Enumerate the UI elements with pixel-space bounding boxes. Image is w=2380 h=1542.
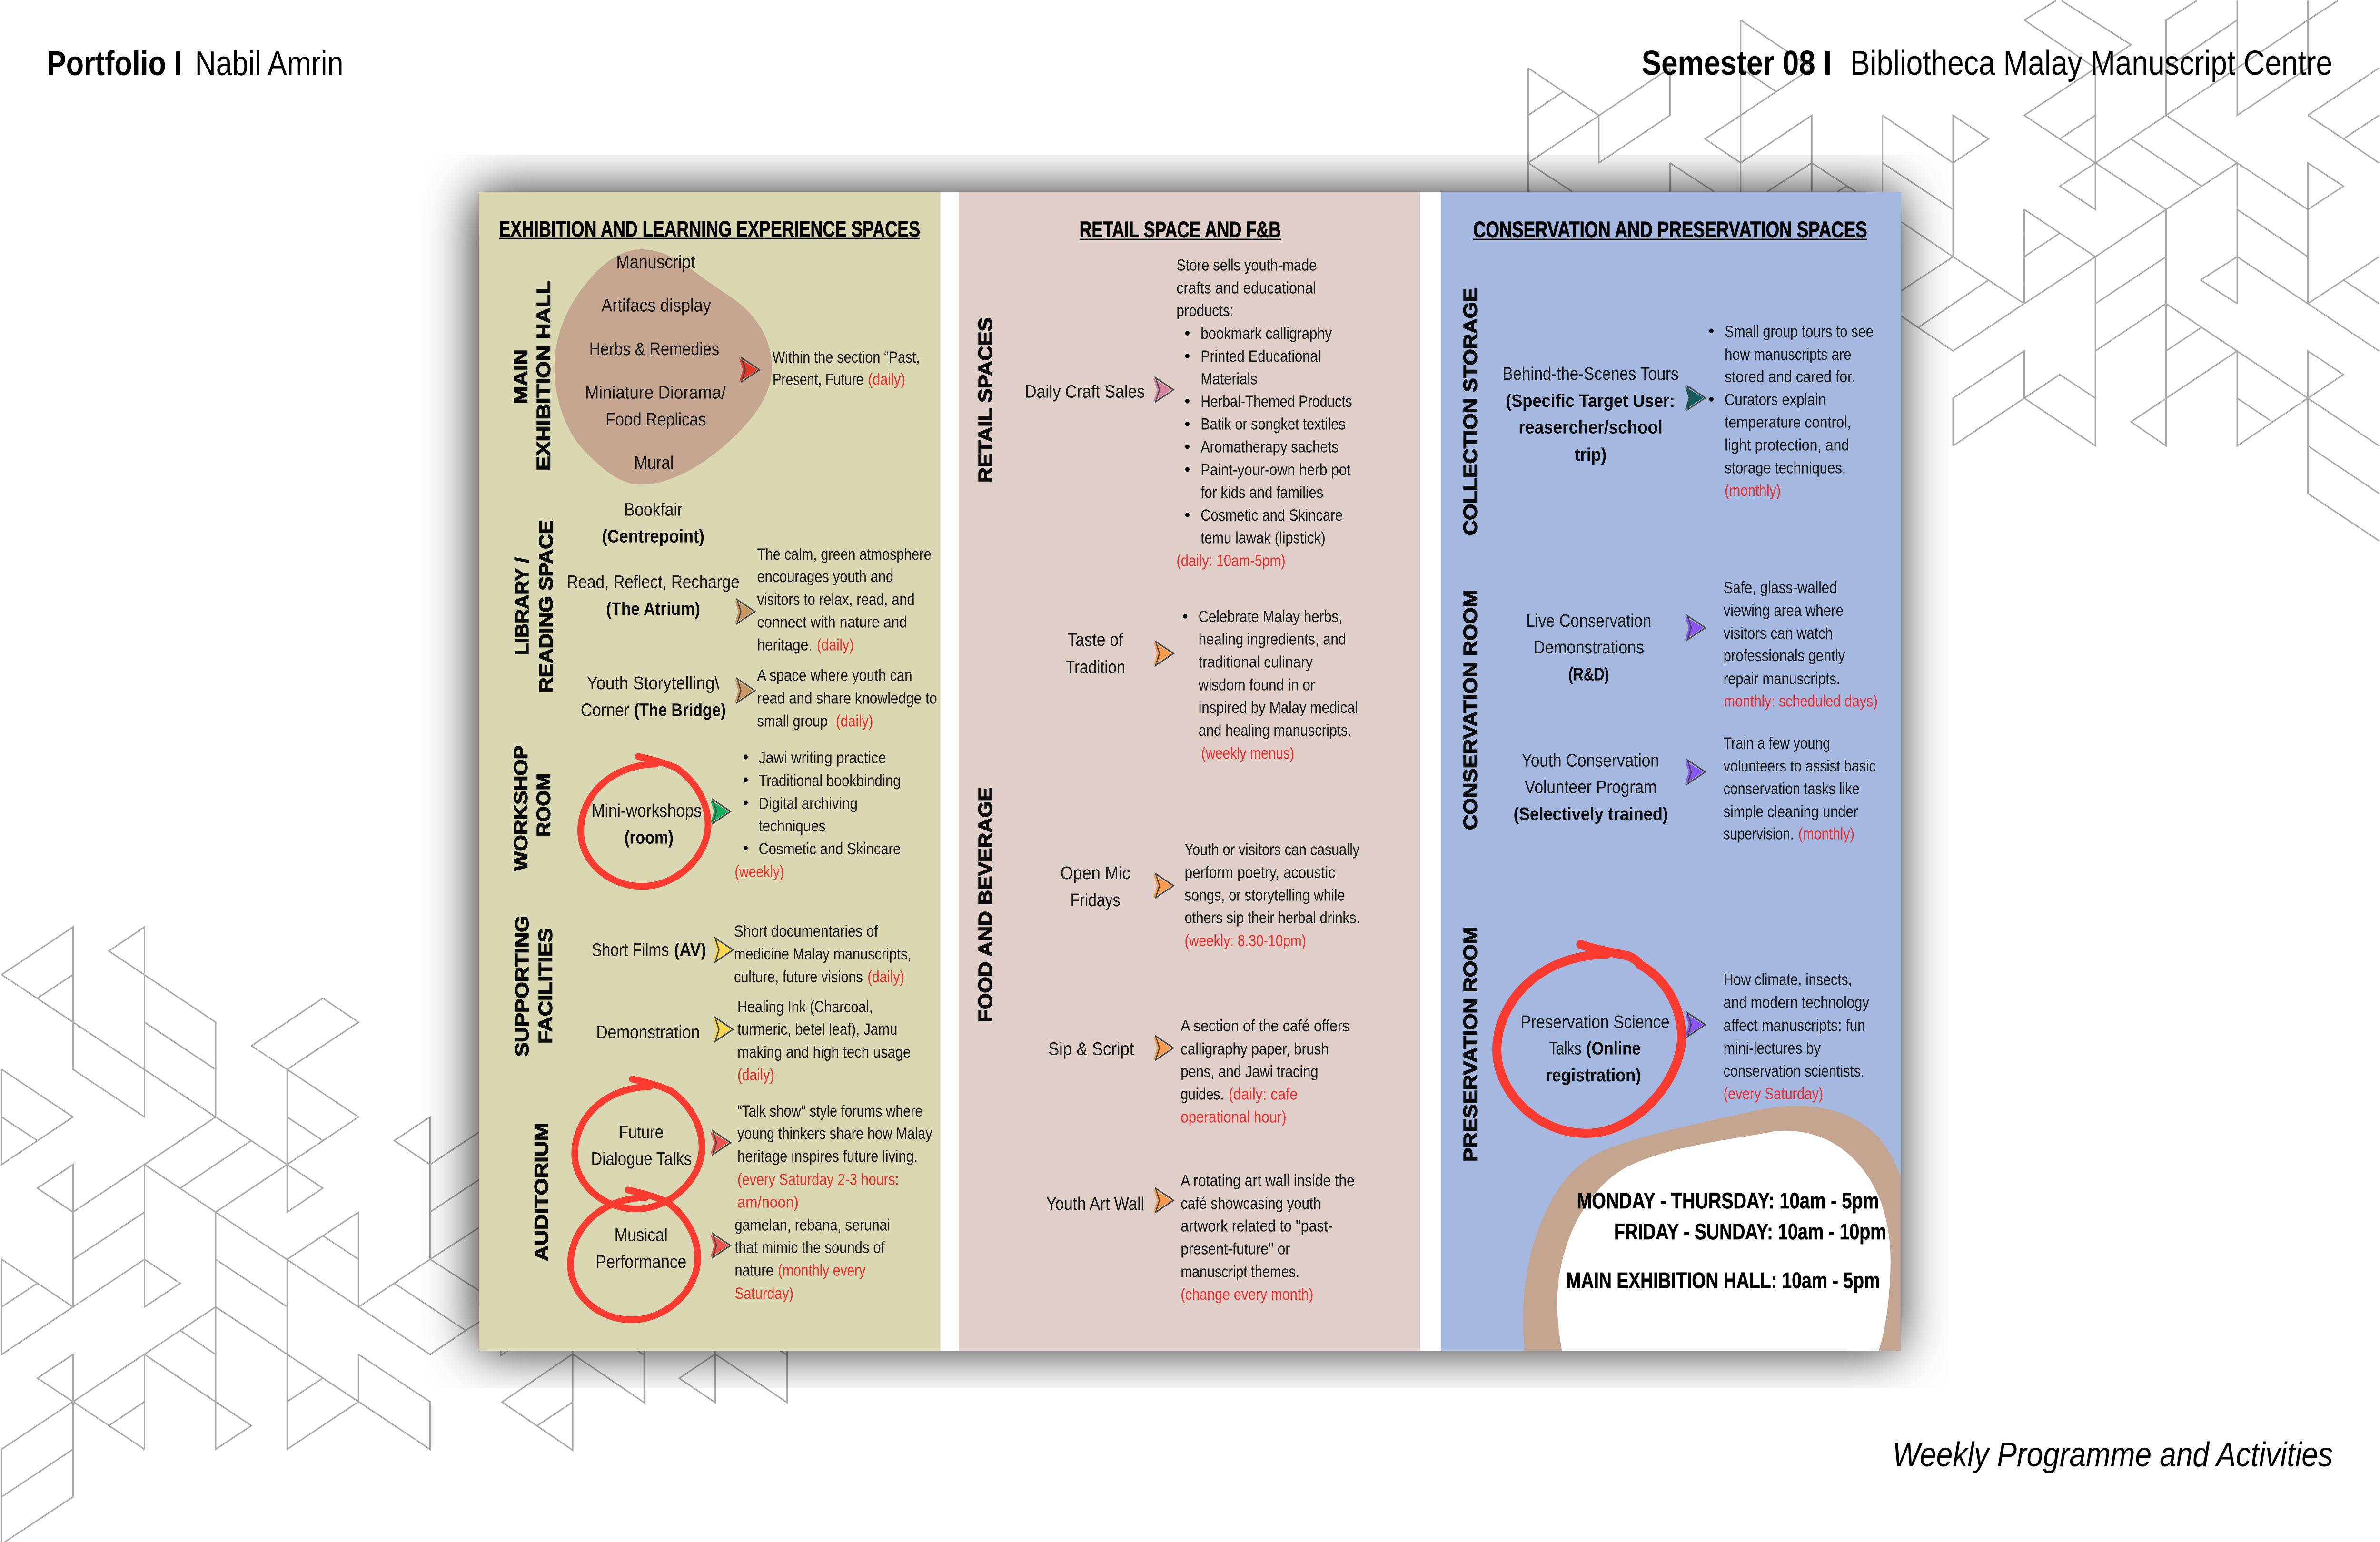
description: gamelan rebana serunai <box>734 1216 890 1303</box>
bullet list: workshop topics <box>734 749 901 881</box>
header left: Portfolio I Nabil Amrin <box>47 45 343 83</box>
description: open mic: Youth or visitors can casually <box>1185 840 1359 859</box>
description: climate insects technology <box>1724 970 1869 1103</box>
description: gamelan rebana serunai: (monthly every <box>778 1261 866 1280</box>
description: calm green atmosphere <box>757 545 932 654</box>
description: short documentaries <box>734 922 912 986</box>
description: rotating art wall: café showcasing youth <box>1180 1194 1321 1212</box>
opening hours text: FRIDAY - SUNDAY: 10am - 10pm <box>1614 1219 1886 1245</box>
activity: short films: (AV) <box>674 940 706 960</box>
activity: youth art wall: Youth Art Wall <box>1046 1194 1144 1214</box>
activity: youth storytelling corner: Youth Storytelling\ <box>587 673 720 693</box>
bullet list: store products: (daily: 10am-5pm) <box>1176 552 1286 570</box>
bullet list: store products: for kids and families <box>1200 483 1323 502</box>
description: knowledge sharing: small group <box>757 712 828 731</box>
activities: bookfair and atrium: (Centrepoint) <box>602 526 704 546</box>
description: train young volunteers: conservation tasks like <box>1724 780 1860 798</box>
description: calm green atmosphere: connect with nature and <box>757 613 907 632</box>
description: open mic: (weekly: 8.30-10pm) <box>1185 931 1306 950</box>
activities: bookfair and atrium: Read, Reflect, Recharge <box>567 572 740 593</box>
description: climate insects technology: conservation scientists. <box>1724 1062 1864 1080</box>
description: talk show forums: young thinkers share how Malay <box>737 1125 932 1143</box>
bullet list: tours: Small group tours to see <box>1725 322 1874 341</box>
bullet list: workshop topics: Jawi writing practice <box>759 749 886 767</box>
description: glass-walled viewing: viewing area where <box>1724 601 1844 620</box>
description: past present future <box>772 348 920 388</box>
blob: white inner shape <box>1557 1131 1891 1351</box>
arrow: orange <box>1153 1036 1173 1060</box>
panel: conservation and preservation spaces <box>1441 192 1901 1351</box>
vertical label: main exhibition hall: MAIN <box>510 349 532 404</box>
bullet list: store products: Batik or songket textiles <box>1200 415 1346 433</box>
exhibit list: Artifacs display <box>601 296 712 316</box>
description: celebrate malay herbs: healing ingredients, and <box>1199 630 1346 648</box>
description: calm green atmosphere: The calm, green atmosphere <box>757 545 932 563</box>
description: train young volunteers <box>1724 734 1876 843</box>
vertical label: workshop room <box>510 745 555 871</box>
vertical label: supporting facilities: SUPPORTING <box>512 916 533 1057</box>
section: preservation room <box>1460 927 1869 1162</box>
description: celebrate malay herbs: traditional culinary <box>1199 653 1313 671</box>
bullet list: tours: storage techniques. <box>1725 458 1846 477</box>
header right: Semester 08 I Bibliotheca Malay Manuscript Centre: Semester 08 I <box>1642 44 1832 82</box>
description: short documentaries: Short documentaries of <box>734 922 878 940</box>
activity: preservation science talks <box>1520 1012 1669 1086</box>
vertical label: conservation room: CONSERVATION ROOM <box>1460 590 1481 830</box>
red hand-drawn circle: preservation science talks <box>1497 944 1682 1133</box>
arrow: orange <box>1153 1188 1173 1212</box>
description: sip and script: pens, and Jawi tracing <box>1180 1062 1318 1080</box>
activity: musical performance <box>595 1225 686 1272</box>
description: celebrate malay herbs: wisdom found in or <box>1198 675 1315 694</box>
activity: mini-workshops: Mini-workshops <box>592 801 702 820</box>
description: healing ink: turmeric, betel leaf), Jamu <box>737 1020 897 1038</box>
arrow: orange <box>1153 642 1173 665</box>
vertical label: workshop room: ROOM <box>533 773 555 837</box>
panel: retail space and F&B <box>959 192 1420 1351</box>
arrow: orange <box>1153 874 1173 898</box>
description: gamelan rebana serunai: that mimic the sounds of <box>734 1238 885 1257</box>
vertical label: main exhibition hall <box>510 281 555 471</box>
activity: behind-the-scenes tours <box>1503 364 1679 465</box>
description: rotating art wall: present-future" or <box>1180 1240 1290 1258</box>
bullet list: store products: Cosmetic and Skincare <box>1200 506 1343 524</box>
header left: Portfolio I Nabil Amrin: Portfolio I <box>47 45 182 83</box>
heading: retail space and F&B: RETAIL SPACE AND F&B <box>1080 217 1281 242</box>
activity: demonstration: Demonstration <box>596 1022 700 1042</box>
description: train young volunteers: simple cleaning under <box>1724 802 1858 820</box>
activity: behind-the-scenes tours: Behind-the-Scenes Tours <box>1503 364 1679 384</box>
exhibit list: Mural <box>634 453 674 473</box>
description: knowledge sharing: A space where youth can <box>757 666 912 685</box>
bullet list: store products <box>1176 256 1352 570</box>
section: retail spaces <box>975 256 1352 570</box>
description: talk show forums <box>737 1102 932 1212</box>
activities: bookfair and atrium: (The Atrium) <box>606 599 700 619</box>
opening hours callout <box>1523 1106 1901 1351</box>
activity: open mic fridays: Open Mic <box>1061 863 1130 883</box>
activity: open mic fridays: Fridays <box>1071 890 1121 910</box>
activity: sip and script: Sip & Script <box>1048 1039 1134 1059</box>
activity: taste of tradition: Tradition <box>1065 657 1125 677</box>
activity: behind-the-scenes tours: trip) <box>1575 445 1606 465</box>
bullet list: store products: Materials <box>1200 370 1257 388</box>
description: healing ink: making and high tech usage <box>737 1043 911 1061</box>
bullet list: tours: light protection, and <box>1725 436 1849 454</box>
description: glass-walled viewing: professionals gently <box>1724 646 1845 665</box>
activity: preservation science talks: Talks <box>1549 1038 1581 1058</box>
description: climate insects technology: mini-lectures by <box>1724 1039 1821 1058</box>
bullet list: store products: Herbal-Themed Products <box>1200 392 1352 411</box>
activity: short films: Short Films <box>592 940 669 960</box>
activity: live conservation demonstrations: Demonstrations <box>1534 638 1644 658</box>
activity: preservation science talks: (Online <box>1586 1038 1641 1058</box>
description: knowledge sharing <box>757 666 937 731</box>
bullet list: workshop topics: techniques <box>759 817 825 835</box>
activity: youth conservation volunteer program: Volunteer Program <box>1525 777 1657 797</box>
arrow: yellow <box>713 1018 733 1041</box>
activity: short films <box>592 940 706 960</box>
opening hours text: MONDAY - THURSDAY: 10am - 5pm <box>1577 1188 1879 1214</box>
description: train young volunteers: Train a few young <box>1724 734 1830 752</box>
description: glass-walled viewing <box>1724 578 1878 710</box>
activities: bookfair and atrium <box>567 499 740 619</box>
arrow: purple <box>1685 616 1705 640</box>
activity: live conservation demonstrations <box>1526 611 1651 684</box>
description: gamelan rebana serunai: nature <box>734 1261 774 1280</box>
description: rotating art wall <box>1180 1171 1355 1304</box>
description: rotating art wall: (change every month) <box>1180 1285 1313 1304</box>
exhibit list: Food Replicas <box>605 409 706 430</box>
section: auditorium <box>531 1079 932 1320</box>
exhibit list: Miniature Diorama/ <box>585 383 726 403</box>
activity: live conservation demonstrations: Live Conservation <box>1526 611 1651 631</box>
description: sip and script: A section of the café offers <box>1180 1017 1349 1035</box>
red hand-drawn circle: future dialogue talks <box>575 1079 702 1209</box>
vertical label: auditorium: AUDITORIUM <box>531 1123 552 1261</box>
activities: bookfair and atrium: Bookfair <box>624 499 683 520</box>
arrow: coral <box>710 1234 731 1257</box>
description: past present future: (daily) <box>868 370 905 388</box>
section: workshop room <box>510 745 901 886</box>
vertical label: preservation room: PRESERVATION ROOM <box>1460 927 1481 1162</box>
description: past present future: Present, Future <box>773 370 863 388</box>
description: climate insects technology: affect manuscripts: fun <box>1724 1016 1865 1035</box>
pattern: upper right isometric lines <box>1528 1 2379 541</box>
description: open mic: others sip their herbal drinks. <box>1185 909 1360 927</box>
arrow: tan <box>734 679 755 702</box>
description: sip and script <box>1180 1017 1349 1126</box>
description: rotating art wall: manuscript themes. <box>1180 1263 1299 1281</box>
description: train young volunteers: supervision. <box>1724 825 1794 843</box>
arrow: purple <box>1685 1013 1705 1037</box>
arrow: coral <box>710 1131 731 1155</box>
description: gamelan rebana serunai: gamelan, rebana, serunai <box>734 1216 890 1235</box>
blob: tan outer shape <box>1523 1106 1901 1351</box>
exhibit list: Manuscript <box>616 252 695 272</box>
footer caption: Weekly Programme and Activities: Weekly Programme and Activities <box>1893 1436 2333 1474</box>
description: short documentaries: culture, future visions <box>734 968 863 986</box>
arrow: teal <box>1685 386 1705 410</box>
arrow: tan <box>734 600 755 623</box>
description: sip and script: calligraphy paper, brush <box>1180 1040 1329 1058</box>
activity: preservation science talks: Preservation Science <box>1520 1012 1669 1032</box>
heading: conservation and preservation: CONSERVATION AND PRESERVATION SPACES <box>1473 217 1867 242</box>
bullet list: tours: Curators explain <box>1725 390 1826 409</box>
red hand-drawn circle: musical performance <box>570 1190 698 1320</box>
vertical label: supporting facilities <box>512 916 556 1057</box>
description: calm green atmosphere: encourages youth and <box>757 568 893 586</box>
activity: preservation science talks: registration) <box>1546 1066 1641 1086</box>
description: calm green atmosphere: heritage. <box>757 636 812 654</box>
activity: youth conservation volunteer program: (Selectively trained) <box>1514 804 1668 824</box>
poster sheet with drop shadow <box>479 192 1901 1351</box>
bullet list: store products: Printed Educational <box>1200 347 1321 366</box>
description: celebrate malay herbs: (weekly menus) <box>1201 744 1294 762</box>
section: food and beverage <box>975 607 1360 1304</box>
red hand-drawn circle: mini-workshops <box>581 757 708 886</box>
activity: daily craft sales: Daily Craft Sales <box>1025 382 1145 402</box>
description: train young volunteers: (monthly) <box>1798 825 1854 843</box>
description: sip and script: operational hour) <box>1180 1108 1287 1126</box>
description: open mic: perform poetry, acoustic <box>1185 863 1335 881</box>
description: sip and script: guides. <box>1180 1085 1224 1103</box>
description: climate insects technology: (every Saturday) <box>1724 1085 1823 1103</box>
description: healing ink: Healing Ink (Charcoal, <box>737 998 873 1016</box>
section: conservation room <box>1460 578 1878 843</box>
description: short documentaries: (daily) <box>867 968 904 986</box>
vertical label: food and beverage: FOOD AND BEVERAGE <box>975 787 996 1022</box>
activity: taste of tradition: Taste of <box>1068 630 1123 650</box>
description: talk show forums: heritage inspires future living. <box>737 1147 918 1166</box>
bullet list: workshop topics: (weekly) <box>734 863 784 881</box>
heading: exhibition and learning: EXHIBITION AND LEARNING EXPERIENCE SPACES <box>499 217 920 241</box>
activity: musical performance: Musical <box>615 1225 668 1245</box>
pattern: lower left isometric lines <box>1 927 787 1542</box>
arrow: yellow <box>713 938 733 962</box>
vertical label: library reading space: READING SPACE <box>536 520 557 692</box>
arrow: green <box>710 800 731 823</box>
activity: youth storytelling corner: (The Bridge) <box>634 700 726 720</box>
activity: mini-workshops <box>592 801 702 848</box>
bullet list: store products: products: <box>1176 301 1234 320</box>
bullet list: workshop topics: Digital archiving <box>759 794 858 813</box>
header right: Semester 08 I Bibliotheca Malay Manuscript Centre: Bibliotheca Malay Manuscript Centre <box>1850 44 2332 82</box>
blob: exhibit list background <box>555 249 772 484</box>
bullet list: tours: (monthly) <box>1725 481 1781 500</box>
description: open mic <box>1185 840 1360 950</box>
section: main exhibition hall <box>510 249 920 484</box>
vertical label: collection storage: COLLECTION STORAGE <box>1460 288 1481 535</box>
panel: exhibition and learning experience spaces <box>479 192 941 1351</box>
vertical label: supporting facilities: FACILITIES <box>535 928 556 1044</box>
vertical label: main exhibition hall: EXHIBITION HALL <box>533 281 555 471</box>
arrow: red <box>739 358 759 382</box>
vertical label: library reading space: LIBRARY / <box>512 557 533 655</box>
bullet list: tours: how manuscripts are <box>1725 345 1851 364</box>
activity: future dialogue talks: Dialogue Talks <box>591 1149 692 1169</box>
description: talk show forums: am/noon) <box>737 1193 799 1212</box>
bullet list: store products: bookmark calligraphy <box>1200 324 1332 343</box>
section: collection storage <box>1460 288 1874 535</box>
description: short documentaries: medicine Malay manuscripts, <box>734 945 912 963</box>
activity: live conservation demonstrations: (R&D) <box>1568 664 1609 684</box>
section: supporting facilities <box>512 916 912 1084</box>
description: celebrate malay herbs: inspired by Malay medical <box>1199 698 1358 717</box>
activity: behind-the-scenes tours: (Specific Target User: <box>1506 391 1675 411</box>
description: talk show forums: (every Saturday 2-3 hours: <box>737 1170 899 1188</box>
activity: future dialogue talks: Future <box>619 1122 664 1142</box>
bullet list: workshop topics: Traditional bookbinding <box>759 771 901 790</box>
activity: open mic fridays <box>1061 863 1130 910</box>
vertical label: retail spaces: RETAIL SPACES <box>975 317 996 483</box>
bullet list: workshop topics: Cosmetic and Skincare <box>759 840 901 858</box>
bullet list: store products: Aromatherapy sachets <box>1200 437 1339 456</box>
activity: youth conservation volunteer program <box>1514 751 1668 824</box>
description: open mic: songs, or storytelling while <box>1185 886 1345 904</box>
exhibit list: Herbs & Remedies <box>589 339 719 359</box>
bullet list: tours: stored and cared for. <box>1725 367 1855 386</box>
arrow: pink <box>1153 378 1173 402</box>
activity: future dialogue talks <box>591 1122 692 1169</box>
bullet list: tours <box>1709 322 1874 500</box>
bullet list: store products: temu lawak (lipstick) <box>1200 529 1326 547</box>
header left: Portfolio I Nabil Amrin: Nabil Amrin <box>195 45 343 83</box>
description: glass-walled viewing: monthly: scheduled days) <box>1724 692 1878 710</box>
description: glass-walled viewing: visitors can watch <box>1724 624 1833 642</box>
description: healing ink <box>737 998 911 1084</box>
activity: musical performance: Performance <box>595 1252 686 1272</box>
activity: youth storytelling corner <box>581 673 726 720</box>
activity: youth storytelling corner: Corner <box>581 700 629 720</box>
bullet list: store products: Paint-your-own herb pot <box>1200 460 1351 479</box>
description: calm green atmosphere: (daily) <box>817 636 854 654</box>
description: knowledge sharing: read and share knowledge to <box>757 689 937 708</box>
description: climate insects technology: and modern technology <box>1724 993 1869 1011</box>
vertical label: library reading space <box>512 520 557 692</box>
vertical label: workshop room: WORKSHOP <box>510 745 532 871</box>
description: talk show forums: “Talk show" style forums where <box>737 1102 922 1120</box>
description: gamelan rebana serunai: Saturday) <box>734 1285 793 1303</box>
opening hours text: MAIN EXHIBITION HALL: 10am - 5pm <box>1566 1268 1880 1294</box>
activity: youth conservation volunteer program: Youth Conservation <box>1522 751 1659 771</box>
description: celebrate malay herbs: and healing manuscripts. <box>1199 721 1351 740</box>
description: glass-walled viewing: repair manuscripts. <box>1724 670 1840 688</box>
bullet list: tours: temperature control, <box>1725 413 1851 431</box>
bullet list: store products: crafts and educational <box>1176 278 1316 297</box>
description: sip and script: (daily: cafe <box>1229 1085 1298 1103</box>
bullet list: store products: Store sells youth-made <box>1176 256 1317 274</box>
exhibit list <box>585 252 726 473</box>
description: celebrate malay herbs <box>1183 607 1358 762</box>
description: glass-walled viewing: Safe, glass-walled <box>1724 578 1837 597</box>
arrow: purple <box>1685 760 1705 784</box>
description: train young volunteers: volunteers to assist basic <box>1724 757 1876 775</box>
description: climate insects technology: How climate, insects, <box>1724 970 1852 988</box>
activity: taste of tradition <box>1065 630 1125 677</box>
description: past present future: Within the section “Past, <box>772 348 920 366</box>
description: calm green atmosphere: visitors to relax, read, and <box>757 591 915 609</box>
section: library and reading space <box>512 499 937 731</box>
description: rotating art wall: artwork related to "past- <box>1180 1217 1333 1235</box>
activity: behind-the-scenes tours: reasercher/school <box>1518 417 1663 437</box>
opening hours text <box>1566 1188 1886 1294</box>
description: healing ink: (daily) <box>737 1066 774 1084</box>
description: celebrate malay herbs: Celebrate Malay herbs, <box>1199 607 1342 626</box>
description: knowledge sharing: (daily) <box>836 712 873 731</box>
description: rotating art wall: A rotating art wall inside the <box>1180 1171 1355 1190</box>
header right: Semester 08 I Bibliotheca Malay Manuscript Centre <box>1642 44 2332 82</box>
activity: mini-workshops: (room) <box>625 828 674 848</box>
